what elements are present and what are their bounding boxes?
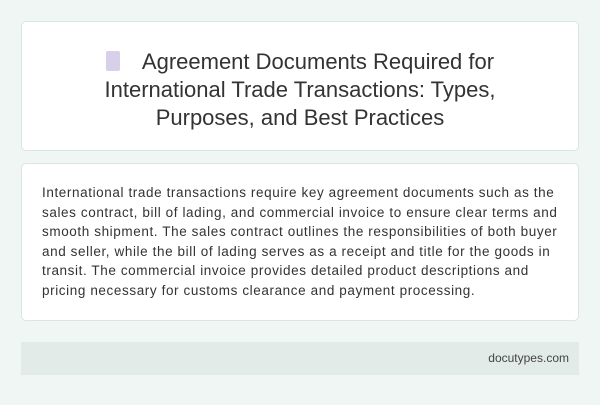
footer: [21, 342, 579, 375]
title: Agreement Documents Required for: [142, 49, 494, 74]
footer text: docutypes.com: [488, 351, 569, 365]
description text: and seller, while the bill of lading serves as a receipt and title for the goods in: [42, 244, 550, 258]
title: International Trade Transactions: Types,: [105, 77, 495, 102]
panel: description: [21, 163, 579, 321]
description text: pricing necessary for customs clearance and payment processing.: [42, 282, 475, 298]
panel: title: [21, 21, 579, 151]
description text: smooth shipment. The sales contract outlines the responsibilities of both buyer: [42, 224, 557, 239]
description text: sales contract, bill of lading, and commercial invoice to ensure clear terms and: [42, 204, 557, 220]
description text: International trade transactions require key agreement documents such as the: [42, 185, 554, 200]
description text: [42, 185, 557, 298]
description text: transit. The commercial invoice provides detailed product descriptions and: [42, 263, 529, 278]
title: Purposes, and Best Practices: [156, 105, 444, 130]
title: [105, 49, 495, 130]
